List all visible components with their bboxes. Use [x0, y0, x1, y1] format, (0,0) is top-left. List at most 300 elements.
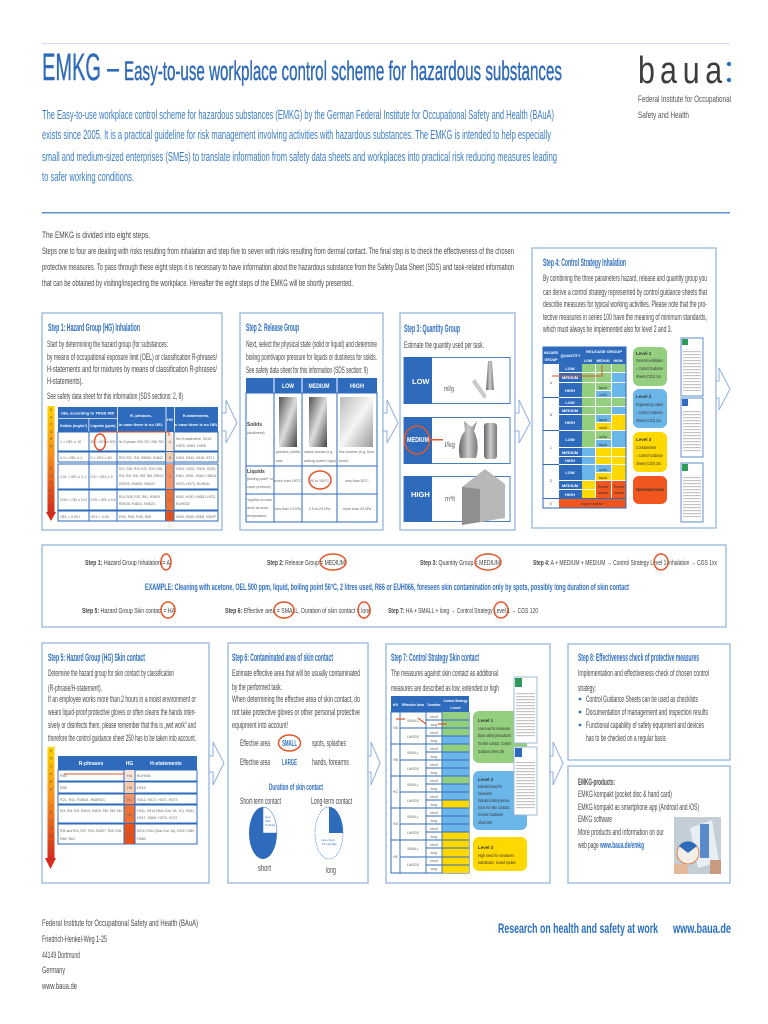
skin control strategy table: SMALL — [407, 815, 419, 819]
release group table: more than 150°C — [274, 479, 302, 483]
level 2 box — [473, 771, 527, 830]
control strategy matrix: MEDIUM — [562, 408, 579, 413]
effective area options: hands, forearms — [312, 757, 349, 768]
skin hazard table: R21, R41, R48/21, R68/R21 — [60, 798, 105, 802]
level 1 box: Guidance Sheet 100 — [478, 749, 504, 754]
hazard table: Liquids (ppm) — [90, 423, 116, 428]
control strategy matrix: solid — [599, 435, 607, 439]
skin control strategy table: long — [431, 723, 437, 727]
panel: step 1 hazard group inhalation: See safety data sheet for this information (SDS sections: 2, 8) — [47, 391, 183, 402]
pie: long-term contact: Long-term contact — [311, 796, 352, 807]
level 2 box: Engineering control — [636, 402, 663, 407]
level 3 box — [473, 837, 527, 871]
level 3 box: Sheets (CGS) 3xx — [636, 461, 662, 466]
panel: EMKG products: EMKG-products: — [578, 777, 615, 788]
control strategy matrix: HIGH — [565, 388, 575, 393]
panel: step 1 hazard group inhalation — [42, 313, 222, 530]
quantity medium: MEDIUM — [407, 435, 429, 444]
release group table: temperature — [247, 514, 266, 518]
hazard table: H-statements, — [183, 413, 209, 418]
quantity low: ml/g — [444, 386, 454, 393]
panel: step 5 hazard group skin contact: Determine the hazard group for skin contact by classification — [48, 668, 174, 679]
skin control strategy table: Level — [450, 705, 461, 710]
panel: step 2 release group: boiling point/vapor pressure for liquids or dustiness for solids. — [246, 352, 377, 363]
control strategy matrix: Expert advise — [581, 502, 603, 506]
release group table: coarse powder (e.g. — [304, 450, 333, 454]
example step 1 — [85, 554, 171, 570]
control strategy matrix: LOW — [565, 400, 575, 405]
control strategy matrix: LOW — [565, 470, 575, 475]
level 2 box: = Control Guidance — [636, 410, 663, 415]
control strategy matrix: HIGH — [565, 458, 575, 463]
control strategy matrix: Expert — [614, 485, 624, 489]
logo: baua: Safety and Health — [638, 110, 689, 120]
skin hazard table: HG — [126, 761, 133, 767]
panel: step 7 control strategy skin contact: The measures against skin contact as additional — [391, 668, 498, 679]
hazard table: in case there is no OEL — [119, 422, 164, 427]
skin hazard table: H315 — [137, 786, 146, 790]
hazard table: HG — [167, 417, 173, 422]
hazard increasing arrow — [45, 747, 56, 869]
panel: EMKG products: More products and information on our — [578, 827, 664, 838]
skin control strategy table: long — [431, 803, 437, 807]
level 1 box: Level 1 — [478, 718, 494, 723]
skin control strategy table: HB — [393, 758, 399, 762]
hazard table: H340, H350, H350i, H360F — [176, 515, 217, 519]
effective area options: SMALL — [282, 739, 297, 748]
level 3 box: High need for measures — [478, 853, 515, 858]
hazard table: H361, H351, H361f, H361d, — [176, 474, 217, 478]
skin control strategy table: short — [430, 811, 438, 815]
skin hazard table: R66 — [60, 774, 67, 778]
skin hazard table: R60, R61 — [60, 837, 75, 841]
pie: short-term contact: than — [265, 819, 271, 823]
example step 5: Step 5: Hazard Group Skin contact = HA — [82, 606, 175, 615]
hazard table: H302, H332, H318, H371 — [176, 456, 214, 460]
footer slogan: Research on health and safety at work — [498, 920, 658, 936]
skin control strategy table: SMALL — [407, 847, 419, 851]
footer address: 44149 Dortmund — [42, 950, 80, 961]
hazard table: 50 < OEL ≤ 500 — [90, 440, 116, 444]
annotation: selected skin hazard — [64, 773, 124, 775]
release group table: vapor pressure) — [247, 485, 271, 489]
panel: step 6 contaminated area: Estimate effective area that will be usually contaminated — [232, 668, 360, 679]
hazard table: 0.5 < OEL ≤ 5 — [90, 475, 113, 479]
example step 2 — [267, 554, 346, 570]
level 2 box — [633, 389, 667, 428]
release group table: *applies to work — [247, 498, 272, 502]
skin control strategy table: LARGE — [407, 735, 420, 739]
skin hazard table: R-phrases — [79, 761, 103, 767]
panel: step 8 effectiveness check: strategy: — [578, 683, 596, 694]
annotation: selected strategy path — [552, 365, 602, 376]
effective area options: Effective area — [240, 738, 270, 749]
control strategy matrix: MEDIUM — [562, 450, 579, 455]
skin hazard table: H-statements — [150, 761, 182, 767]
control strategy matrix: A — [550, 381, 553, 385]
skin control strategy table: short — [430, 779, 438, 783]
skin control strategy table: HG — [393, 703, 398, 707]
effective area options — [240, 735, 349, 768]
level 1 box: for skin contact, Control — [478, 741, 511, 746]
control guidance sheet thumbnails — [681, 338, 703, 522]
panel: step 5 hazard group skin contact: therefore the control guidance sheet 250 has to be taken into account. — [48, 733, 196, 744]
hazard table: 5 < OEL ≤ 50 — [90, 456, 112, 460]
overview text — [42, 230, 514, 289]
control strategy matrix: QUANTITY — [560, 353, 581, 358]
effective area options: LARGE — [282, 758, 297, 767]
intro text — [42, 108, 557, 184]
skin control strategy table: short — [430, 763, 438, 767]
skin hazard table: HA — [127, 774, 133, 778]
annotation: selected skin strategy path — [396, 718, 447, 724]
duration heading: Duration of skin contact — [269, 782, 323, 792]
pie: long-term contact — [311, 796, 352, 876]
release group table: 50 to 150°C — [310, 479, 329, 483]
intro text: to safer working conditions. — [42, 170, 134, 184]
hazard table: H370, H373, EUH031 — [176, 482, 210, 486]
pie: short-term contact: short — [258, 863, 271, 874]
release group table: wax — [276, 459, 283, 463]
skin hazard table: R35 and R34, R27, R15, R39/27, R45, R46, — [60, 829, 122, 833]
skin control strategy table: LARGE — [407, 863, 420, 867]
quantity high: HIGH — [411, 490, 430, 499]
panel: step 1 hazard group inhalation: H-statements). — [47, 376, 83, 387]
hazard table — [58, 407, 219, 521]
overview text: The EMKG is divided into eight steps. — [42, 230, 150, 241]
hazard table: B — [169, 456, 172, 460]
release group table: granules, pellets, — [276, 450, 301, 454]
panel: step 1 hazard group inhalation: Step 1: Hazard Group (HG) Inhalation — [48, 322, 140, 334]
skin control strategy table: HE — [393, 855, 399, 859]
hazard table: Solids (mg/m³) — [60, 423, 88, 428]
level 3 box: Containment — [636, 445, 657, 450]
hazard increasing arrow: HAZARD INCREASE — [49, 408, 53, 518]
control strategy matrix: liquid — [599, 418, 607, 422]
release group table: (dustiness) — [247, 431, 265, 435]
control strategy matrix: liquid — [599, 443, 607, 447]
skin hazard table: EUH066 — [137, 774, 151, 778]
release group table: HIGH — [350, 383, 364, 390]
panel: worked example — [42, 545, 726, 627]
panel: step 6 contaminated area: equipment into account! — [232, 720, 288, 731]
hazard table: R20, R22, R41, R68/20, R48/22 — [119, 456, 163, 460]
panel: step 6 contaminated area — [228, 643, 368, 883]
skin control strategy table: HA — [393, 726, 399, 730]
panel: step 3 quantity group: Step 3: Quantity Group — [404, 323, 460, 335]
skin hazard table: HC — [127, 798, 132, 802]
skin control strategy table: Duration — [428, 702, 441, 707]
hazard table: A — [169, 440, 172, 444]
skin hazard table: HE — [127, 833, 133, 837]
level 2 box: tions for skin contact, — [478, 805, 510, 810]
hazard table: R- phrases, — [130, 413, 152, 418]
control strategy matrix: HIGH — [565, 420, 575, 425]
level 3 box — [633, 432, 667, 472]
level 2 box: Extended safety precau- — [478, 798, 510, 803]
pie: short-term contact: less — [265, 815, 271, 819]
hazard table: 0.05 < OEL ≤ 0.5 — [90, 498, 116, 502]
skin hazard table: H312, H317, H371, H373 — [137, 798, 177, 802]
panel: EMKG products: web page www.baua.de/emkg — [577, 840, 644, 851]
control strategy matrix: liquid — [599, 476, 607, 480]
quantity high — [404, 469, 510, 525]
panel: step 1 hazard group inhalation: H-statements and for mixtures by means of classification R-phrases/ — [47, 364, 217, 375]
hazard table: No R-phrase, R36, R37, R65, R67 — [119, 440, 164, 444]
hazard table: R39/20, R48/20, R48/22 — [119, 482, 155, 486]
pie: long-term contact: 15 min/day — [322, 842, 337, 846]
skin control strategy table: long — [431, 819, 437, 823]
effective area options: Effective area — [240, 757, 270, 768]
level 1 box: Sheets (CGS) 1xx — [636, 374, 662, 379]
panel: step 5 hazard group skin contact: sively or disinfects them, please remember that this is „wet work“ and — [48, 720, 196, 731]
skin control strategy table: SMALL — [407, 751, 419, 755]
arrow: step 6 to 7 — [368, 742, 380, 785]
annotation: selected boiling range — [309, 471, 331, 489]
hazard table: C — [169, 475, 172, 479]
level 3 box: Level 3 — [478, 845, 494, 850]
control strategy matrix: B — [550, 413, 553, 417]
example step 6: Step 6: Effective area = SMALL, Duration of skin contact = long — [225, 606, 371, 615]
footer address: Friedrich-Henkel-Weg 1-25 — [42, 934, 107, 945]
control strategy matrix: E — [550, 502, 553, 506]
control strategy matrix: LOW — [565, 437, 575, 442]
special advice box: Special expert advice — [636, 487, 664, 492]
panel: EMKG products: EMKG software — [578, 814, 612, 825]
panel: step 5 hazard group skin contact: If an employee works more than 2 hours in a moist environment or — [48, 694, 196, 705]
control strategy matrix: HAZARD — [544, 350, 558, 355]
panel: step 2 release group — [240, 313, 383, 530]
example step 5 — [82, 602, 175, 618]
panel: step 5 hazard group skin contact — [42, 643, 209, 883]
logo: baua: Federal Institute for Occupational — [638, 94, 731, 104]
skin control strategy table: short — [430, 859, 438, 863]
control strategy matrix — [543, 347, 626, 508]
quantity high: m³/t — [445, 496, 455, 503]
skin control strategy table: LARGE — [407, 831, 420, 835]
level 1 box: Basic safety precautions — [478, 733, 512, 738]
panel: step 1 hazard group inhalation: by means of occupational exposure limit (OEL) or classification R-phrases/ — [47, 352, 217, 363]
hazard table: OEL < 0.05 — [90, 515, 109, 519]
panel: step 7 control strategy skin contact: Step 7: Control Strategy Skin contact — [391, 652, 479, 664]
quantity low — [404, 357, 510, 404]
hazard table: H301, H331, H318, H330, — [176, 467, 216, 471]
control strategy matrix: MEDIUM — [596, 359, 610, 363]
level 1 box: = Control Guidance — [636, 366, 663, 371]
hazard table: 1 < OEL ≤ 10 — [60, 440, 81, 444]
skin hazard table: H310, H314 (Skin Corr 1A), H340, H350, — [137, 829, 195, 833]
hazard table: No H-statement, H319; — [176, 437, 212, 441]
control strategy matrix: C — [550, 446, 553, 450]
control strategy matrix: MEDIUM — [562, 375, 579, 380]
hazard table: R21, R25, R29, R31, R34, R35, — [119, 467, 163, 471]
panel: step 6 contaminated area: not take protective gloves or other personal protective — [232, 707, 360, 718]
hazard table: E — [169, 515, 172, 519]
panel: step 1 hazard group inhalation: Start by determining the hazard group (for substances: — [47, 339, 168, 350]
release group table: (boiling point* or — [247, 477, 274, 481]
hazard table: 0.1 < OEL ≤ 1 — [60, 456, 82, 460]
control strategy matrix: HIGH — [565, 492, 575, 497]
example step 4 — [533, 554, 717, 570]
skin hazard table: R38 — [60, 786, 67, 790]
release group table — [246, 378, 377, 522]
overview text: that can be obtained by visiting/inspecting the workplace. Hereafter the eight steps of the EMKG will be shortly presented. — [42, 278, 353, 289]
example step 7 — [388, 602, 538, 618]
panel: step 4 control strategy inhalation — [532, 248, 716, 528]
level 1 box: Level 1 — [636, 351, 652, 356]
arrow: step 5 to 6 — [209, 742, 224, 785]
release group table: less than 50°C — [345, 479, 369, 483]
hazard table: 0.001 < OEL ≤ 0.01 — [60, 498, 87, 502]
hazard table: R45, R46, R49, R60 — [119, 515, 151, 519]
annotation: selected OEL value — [94, 432, 169, 450]
skin control strategy table: Effective Area — [402, 702, 425, 707]
arrow: step 1 to 2 — [222, 400, 237, 443]
hazard table: 0.01 < OEL ≤ 0.1 — [60, 475, 86, 479]
pie: short-term contact — [240, 796, 281, 874]
panel: step 8 effectiveness check — [568, 644, 730, 760]
arrow: step 4 to example — [716, 368, 730, 410]
footer address — [41, 918, 198, 992]
skin control strategy table: long — [431, 867, 437, 871]
skin hazard table: HD — [127, 813, 132, 817]
photos of dusts — [279, 397, 373, 447]
skin control strategy table: short — [430, 715, 438, 719]
panel: step 2 release group: See safety data sheet for this information (SDS section: 9) — [246, 365, 368, 376]
skin hazard table: R24, R34, R43, R39/24, R48/24, R62, R63, R64 — [60, 809, 122, 813]
example step 3 — [420, 554, 501, 570]
control strategy matrix: advise — [614, 491, 624, 495]
level 2 box: Sheets (CGS) 2xx — [636, 418, 662, 423]
control strategy matrix: solid — [599, 426, 607, 430]
skin control strategy table: LARGE — [407, 799, 420, 803]
skin control strategy table: long — [431, 835, 437, 839]
skin control strategy table: short — [430, 827, 438, 831]
skin control strategy table: SMALL — [407, 719, 419, 723]
control strategy matrix: solid — [599, 393, 607, 397]
control strategy matrix: solid — [599, 468, 607, 472]
hazard table: D — [169, 498, 172, 502]
skin control strategy table: short — [430, 731, 438, 735]
skin hazard table: HB — [127, 786, 133, 790]
level 2 box: Control Guidance — [478, 812, 503, 817]
release group table: washing powder, sugar) — [304, 459, 336, 463]
quantity medium — [404, 417, 510, 464]
level 2 box: Extended need for — [478, 784, 502, 789]
control strategy matrix: D — [550, 479, 553, 483]
hazard table: H303, H304, H305 — [176, 444, 206, 448]
footer address: www.baua.de — [41, 981, 77, 992]
footer website: www.baua.de — [672, 920, 731, 936]
title: EMKG — [42, 47, 101, 89]
level 3 box: = Control Guidance — [636, 453, 663, 458]
release group table: LOW — [282, 383, 295, 390]
skin control strategy table: long — [431, 771, 437, 775]
pie: long-term contact: more than — [321, 838, 335, 842]
skin control strategy table: Control Strategy — [444, 698, 468, 703]
control strategy matrix: advise — [598, 491, 608, 495]
level 1 box — [633, 347, 667, 386]
hazard table: R24, R28, R32, R61, R39/24, — [119, 495, 161, 499]
release group table: done at room — [247, 506, 268, 510]
hazard increasing arrow — [46, 406, 56, 521]
skin control strategy table: long — [431, 851, 437, 855]
skin control strategy table: short — [430, 843, 438, 847]
logo: baua — [638, 50, 731, 120]
panel: step 3 quantity group — [400, 313, 515, 530]
panel: step 8 effectiveness check: has to be checked on a regular basis — [586, 733, 666, 744]
skin control strategy table: SMALL — [407, 783, 419, 787]
panel: step 5 hazard group skin contact: Step 5: Hazard Group (HG) Skin contact — [48, 652, 145, 664]
hazard increasing arrow: HAZARD INCREASE — [49, 749, 53, 864]
panel: step 5 hazard group skin contact: wears liquid-proof protective gloves or often cleans the hands inten- — [47, 707, 196, 718]
panel: step 6 contaminated area: When determining the effective area of skin contact, do — [232, 694, 360, 705]
example step 3: Step 3: Quantity Group = MEDIUM — [420, 558, 500, 567]
panel: step 5 hazard group skin contact: (R-phrase/H-statement). — [48, 683, 102, 694]
panel: step 4 control strategy inhalation: Step 4: Control Strategy Inhalation — [543, 257, 626, 269]
level 1 box — [473, 711, 527, 763]
panel: EMKG products — [568, 766, 730, 883]
skin hazard table — [58, 756, 197, 844]
quantity low: LOW — [412, 377, 430, 386]
hazard table: OEL < 0.001 — [60, 515, 80, 519]
effective area options: spots, splashes — [312, 738, 346, 749]
example step 1: Step 1: Hazard Group Inhalation = A — [85, 558, 170, 567]
control strategy matrix: RELEASE GROUP — [586, 349, 622, 354]
level 1 box: Low need for measures — [478, 726, 511, 731]
control strategy matrix: LOW — [584, 359, 593, 363]
panel: step 7 control strategy skin contact: measures are described as low, extended or high — [391, 683, 499, 694]
example step 6 — [225, 602, 371, 618]
pie: short-term contact: 15 min/day — [265, 823, 275, 827]
panel: step 7 control strategy skin contact — [386, 644, 550, 883]
example step 7: Step 7: HA + SMALL + long → Control Strategy Level 1 → CGS 120 — [388, 606, 538, 615]
arrow: step 2 to 3 — [383, 400, 398, 443]
skin control strategy table — [391, 696, 469, 873]
level 2 box: measures — [478, 791, 493, 796]
control strategy matrix: HIGH — [614, 359, 623, 363]
example step 2: Step 2: Release Group = MEDIUM — [267, 558, 345, 567]
panel: step 6 contaminated area: by the performed task. — [232, 682, 282, 693]
release group table: less than 0.5 kPa — [275, 507, 301, 511]
skin control strategy table: short — [430, 747, 438, 751]
skin control strategy table: short — [430, 795, 438, 799]
release group table: more than 25 kPa — [343, 507, 371, 511]
panel: step 2 release group: Step 2: Release Group — [246, 322, 299, 334]
skin control strategy table: long — [431, 787, 437, 791]
footer address: Germany — [42, 965, 65, 976]
divider rule — [42, 212, 730, 214]
skin control strategy table: HD — [393, 822, 398, 826]
panel: EMKG products: EMKG kompakt (pocket disc & hand card) — [578, 789, 672, 800]
release group table: fine powder (e.g. flour, — [339, 450, 375, 454]
level 3 box: substitution, closed system — [478, 860, 516, 865]
footer address: Federal Institute for Occupational Safety and Health (BAuA) — [42, 918, 198, 929]
hazard table: OEL according to TRGS 900 — [61, 410, 115, 416]
level 3 box: Level 3 — [636, 437, 652, 442]
arrow: step 3 to 4 — [515, 400, 530, 443]
hazard table: R39/28, R48/21, R48/23 — [119, 502, 155, 506]
release group table: 0.5 to 25 kPa — [309, 507, 330, 511]
release group table: MEDIUM — [308, 383, 330, 390]
control strategy matrix: liquid — [599, 386, 607, 390]
skin hazard table: H311, H314 (Skin Corr 1B, 1C), H361, — [137, 809, 195, 813]
level 2 box: Sheet 260 — [478, 820, 492, 825]
control guidance sheet thumbnails — [514, 677, 537, 815]
level 2 box: Level 2 — [478, 777, 494, 782]
release group table: toner) — [339, 459, 348, 463]
level 2 box: Level 2 — [636, 394, 652, 399]
